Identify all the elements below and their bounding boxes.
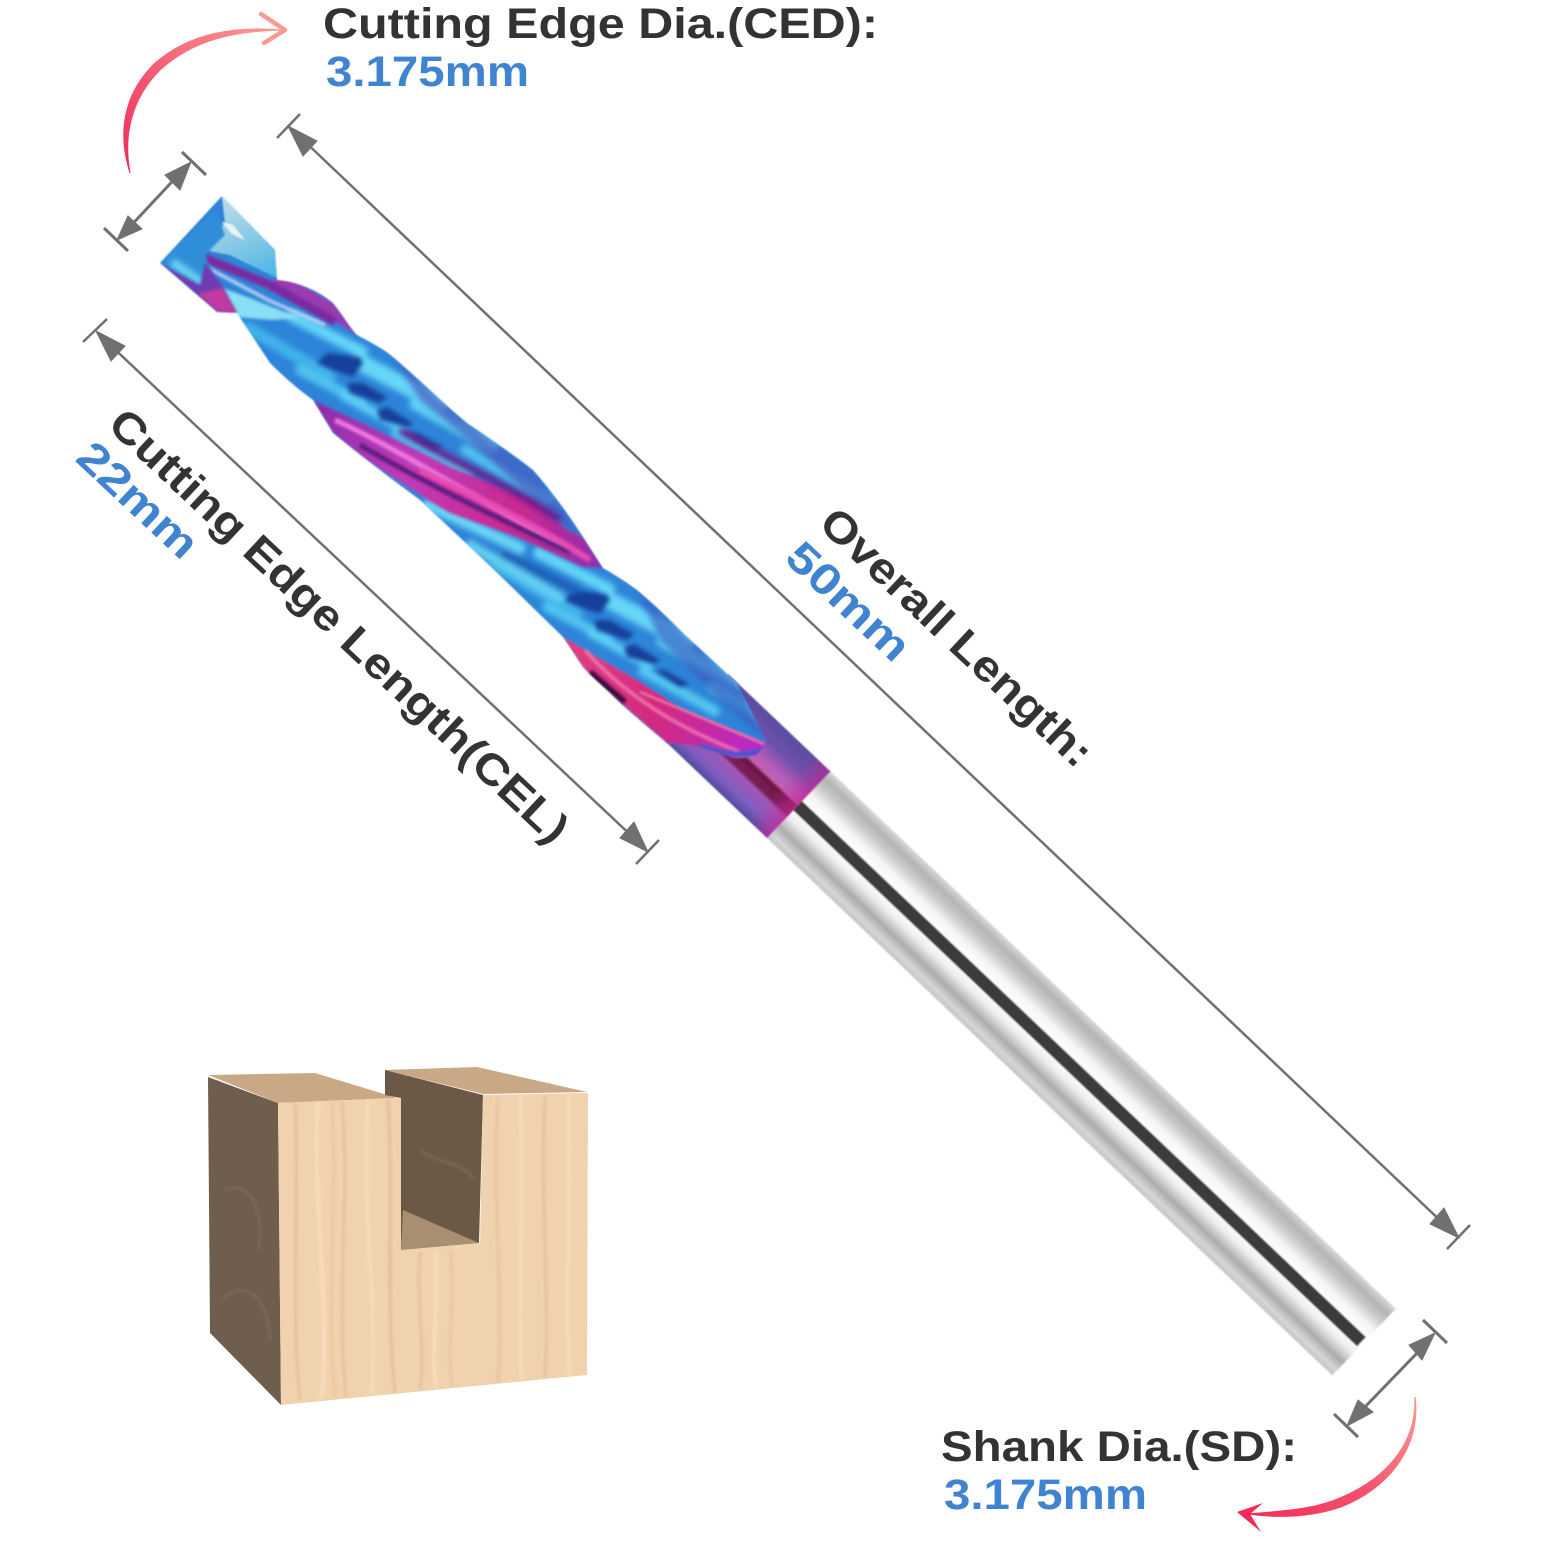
wood grain [295,1095,570,1400]
label: shank diameter: Shank Dia.(SD): [941,1423,1297,1471]
arrow: curved arrow to cutting edge diameter label [124,14,285,173]
block front face [278,1093,588,1405]
slot inside wall [385,1070,483,1250]
shank [766,771,1396,1375]
block top faces [208,1073,397,1103]
title: cutting edge diameter: Cutting Edge Dia.(CED): [323,0,878,48]
dimension: cutting edge diameter [104,152,206,251]
block left face [208,1077,281,1405]
label: overall length: Overall Length: [810,498,1103,777]
label: cutting edge length: 22mm [67,432,208,569]
router bit [150,190,1396,1375]
lower transition streaks [428,505,575,598]
dimension: overall length [277,114,1470,1249]
label: overall length: 50mm [776,532,920,671]
purple neck [665,674,830,838]
label: shank diameter: 3.175mm [944,1471,1147,1519]
tip relief faces [205,196,277,278]
slot floor [401,1210,479,1250]
title: cutting edge diameter [323,0,878,96]
spiral cutting flutes [150,190,795,770]
magenta flute two [563,637,767,758]
small purple spur [270,272,357,335]
arrow: curved arrow to shank diameter label [1237,1397,1416,1532]
dimension: cutting edge length [83,319,659,864]
upper edge shading [393,357,583,537]
dimension: shank diameter [1334,1320,1447,1437]
wood block with slot [208,1067,588,1405]
title: cutting edge diameter: 3.175mm [326,48,529,96]
label: cutting edge length: Cutting Edge Length(CEL) [99,399,578,853]
magenta flute one [313,400,603,568]
label: shank diameter [941,1423,1297,1519]
